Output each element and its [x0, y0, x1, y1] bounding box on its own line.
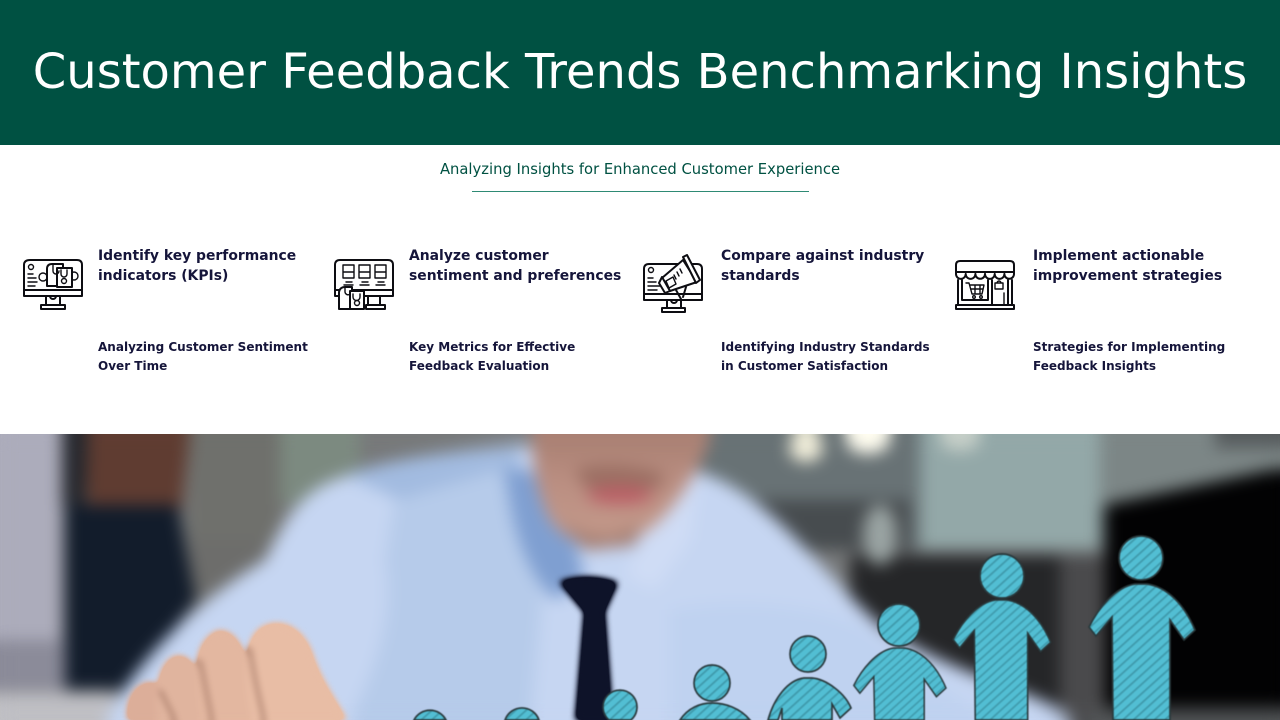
text: step 2 detail: Feedback Evaluation	[409, 358, 549, 372]
figure 1	[414, 710, 446, 720]
panel: step 2	[334, 248, 621, 372]
subtitle: Analyzing Insights for Enhanced Customer Experience	[440, 160, 840, 178]
figure 7	[953, 554, 1051, 720]
text: step 4 detail: Feedback Insights	[1033, 358, 1156, 372]
text: step 1 detail	[98, 340, 308, 372]
hand	[128, 624, 346, 720]
figure 3	[603, 690, 637, 720]
heading: step 3	[721, 248, 924, 284]
photo background and blurred person	[0, 426, 1280, 720]
text: step 3 detail: in Customer Satisfaction	[721, 358, 888, 372]
heading: step 3: standards	[721, 268, 800, 284]
header banner	[0, 0, 1280, 145]
text: step 2 detail: Key Metrics for Effective	[409, 340, 575, 354]
heading: step 2: Analyze customer	[409, 248, 549, 264]
heading: step 1	[98, 248, 296, 284]
icon: storefront with cart	[955, 260, 1015, 310]
panel: step 1	[23, 248, 308, 372]
figure 4	[680, 665, 750, 720]
heading: step 2	[409, 248, 621, 284]
text: step 4 detail: Strategies for Implementing	[1033, 340, 1225, 354]
panel: step 3	[643, 248, 930, 372]
heading: step 3: Compare against industry	[721, 248, 924, 264]
icon: monitor with shopping bags	[23, 259, 83, 310]
figure 5	[768, 636, 851, 720]
tie	[560, 578, 617, 720]
panel: step 4	[955, 248, 1225, 372]
figure 2	[505, 708, 539, 720]
figures: rising row of people	[414, 536, 1195, 720]
figure 8	[1089, 536, 1195, 720]
heading: step 4: improvement strategies	[1033, 268, 1222, 284]
text: step 3 detail	[721, 340, 930, 372]
photo: businessman arranging growing figures	[0, 434, 1280, 720]
icon: monitor with product cards	[334, 259, 394, 310]
heading: step 4: Implement actionable	[1033, 248, 1204, 264]
heading: step 1: indicators (KPIs)	[98, 268, 228, 284]
text: step 3 detail: Identifying Industry Standards	[721, 340, 930, 354]
heading: step 4	[1033, 248, 1222, 284]
icon: monitor with megaphone	[643, 254, 703, 313]
heading: step 2: sentiment and preferences	[409, 268, 621, 284]
title: Customer Feedback Trends Benchmarking Insights	[33, 44, 1247, 100]
text: step 4 detail	[1033, 340, 1225, 372]
figure 6	[854, 604, 946, 720]
text: step 1 detail: Analyzing Customer Sentiment	[98, 340, 308, 354]
heading: step 1: Identify key performance	[98, 248, 296, 264]
text: step 2 detail	[409, 340, 575, 372]
text: step 1 detail: Over Time	[98, 358, 167, 372]
